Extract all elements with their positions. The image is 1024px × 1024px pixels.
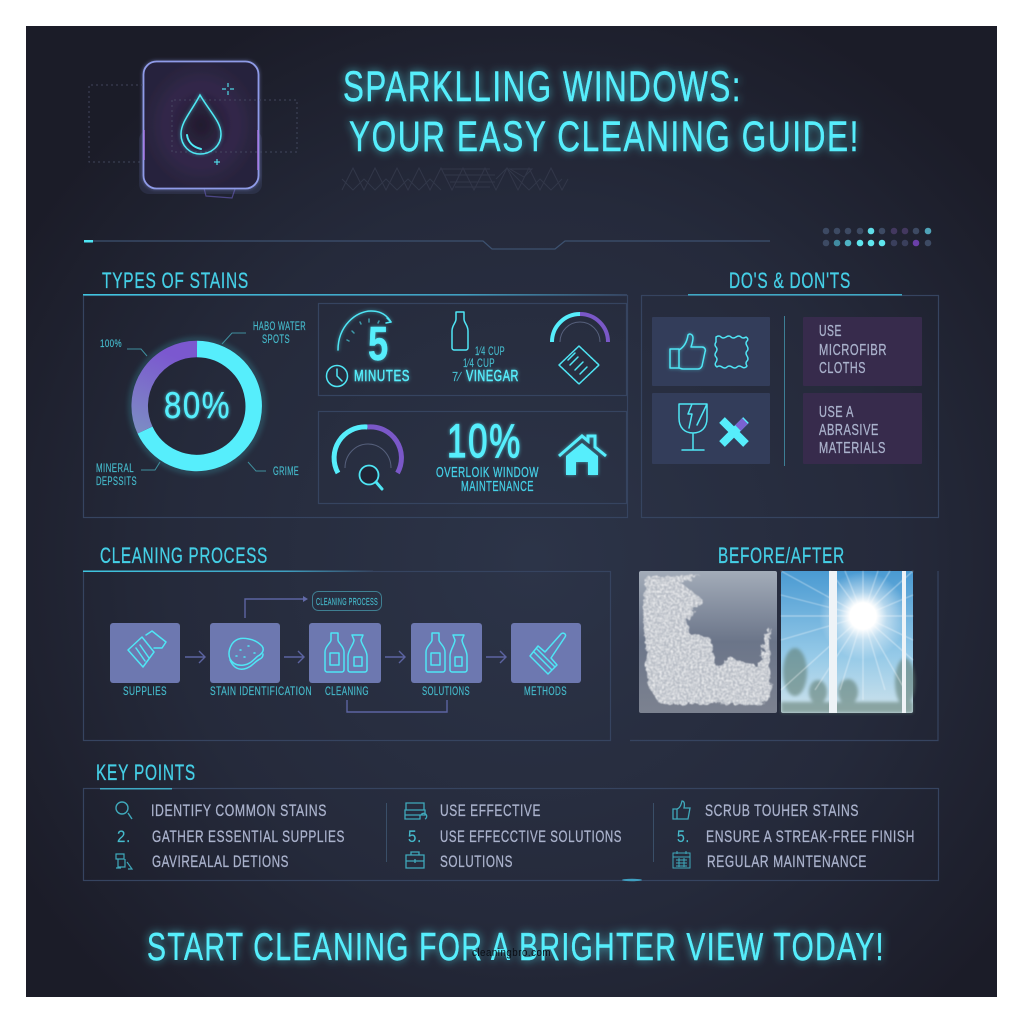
panel: types of stains [83, 294, 628, 518]
step: methods: METHODS [524, 686, 567, 698]
stat: 10%: 10% [447, 414, 522, 467]
donut labels: SPOTS [262, 334, 290, 346]
icon: supply tray [405, 803, 427, 819]
heading: cleaning process: CLEANING PROCESS [100, 543, 268, 568]
icon: water drop in glowing frame [89, 62, 297, 198]
icon: magnifier [116, 802, 132, 819]
stat: 10%: MAINTENANCE [461, 479, 534, 495]
column 3: 5. [677, 827, 690, 846]
column 3: REGULAR MAINTENANCE [707, 852, 867, 871]
icon: calendar [673, 851, 690, 868]
panel: time and vinegar stats [318, 304, 626, 396]
don't text card: USE A [819, 404, 854, 421]
callout: cleaning process pill [245, 592, 382, 618]
arrow [385, 651, 405, 663]
gauge: 5 minutes [326, 311, 410, 386]
donut labels: DEPSSITS [96, 476, 137, 488]
step: cleaning [309, 623, 381, 698]
don't text card [803, 393, 922, 464]
title: YOUR EASY CLEANING GUIDE! [349, 113, 860, 161]
don't text card: MATERIALS [819, 440, 886, 457]
column 1 [116, 801, 345, 871]
do text card [803, 317, 922, 386]
icon: vinegar bottle and measures: 7⁄ [452, 369, 462, 384]
column 3: ENSURE A STREAK-FREE FINISH [706, 827, 915, 846]
icon: thumbs up [673, 801, 690, 819]
icon: toolbox [406, 852, 424, 868]
do text card: USE [819, 323, 842, 340]
icon: cleaning kit [116, 854, 132, 869]
gauge: 5 minutes: MINUTES [354, 368, 410, 385]
stat: 10%: OVERLOIK WINDOW [436, 465, 539, 481]
icon: vinegar bottle and measures: 1⁄4 CUP [475, 344, 505, 358]
icon: house [559, 436, 606, 475]
icon: vinegar bottle and measures [452, 312, 519, 385]
connector bracket [347, 700, 447, 712]
step: supplies: SUPPLIES [123, 686, 167, 698]
heading: types of stains: TYPES OF STAINS [102, 268, 249, 293]
donut labels: 100% [100, 338, 122, 350]
icon: vinegar bottle and measures: 1⁄4 CUP [463, 356, 495, 370]
donut labels [96, 321, 306, 488]
column 2 [405, 801, 622, 871]
callout: cleaning process pill: CLEANING PROCESS [316, 596, 378, 608]
title [343, 63, 860, 161]
column 2: USE EFFECCTIVE SOLUTIONS [440, 827, 622, 846]
column 1: GATHER ESSENTIAL SUPPLIES [152, 827, 345, 846]
panel: before/after frame [630, 571, 938, 740]
column 2: USE EFFECTIVE [440, 801, 541, 820]
column 1: GAVIREALAL DETIONS [152, 852, 289, 871]
heading: key points: KEY POINTS [96, 760, 196, 785]
do card: thumb and cloth [652, 317, 770, 386]
watermark: cleaningbro.com [472, 947, 551, 959]
column 1: 2. [117, 827, 131, 846]
step: stain identification [210, 623, 312, 698]
title: SPARKLLING WINDOWS: [343, 63, 742, 111]
arrow [486, 651, 506, 663]
panel: key points [84, 788, 938, 881]
panel: do's and don'ts [642, 294, 938, 518]
icon: vinegar bottle and measures: VINEGAR [466, 368, 519, 385]
donut labels: MINERAL [96, 463, 134, 475]
gauge: 5 minutes: 5 [368, 318, 390, 371]
column 2: 5. [408, 827, 422, 846]
column 2: SOLUTIONS [440, 852, 513, 871]
step: methods [511, 623, 581, 698]
panel: cleaning process [83, 570, 610, 740]
donut labels: GRIME [273, 466, 299, 478]
don't card: broken glass and cross [652, 393, 770, 464]
heading: before/after: BEFORE/AFTER [718, 543, 845, 568]
column 3: SCRUB TOUHER STAINS [705, 801, 859, 820]
before photo [639, 571, 777, 713]
step: supplies [110, 623, 180, 698]
arrow [185, 651, 205, 663]
step: solutions: SOLUTIONS [422, 686, 470, 698]
header divider [84, 240, 770, 249]
after photo [781, 571, 915, 713]
arrow [284, 651, 304, 663]
do text card: CLOTHS [819, 360, 866, 377]
do text card: MICROFIBR [819, 342, 887, 359]
donut labels: HABO WATER [253, 321, 306, 333]
gauge with magnifier [334, 427, 401, 489]
heading: do's and don'ts: DO'S & DON'TS [729, 268, 851, 293]
donut chart [131, 340, 263, 472]
panel: overlook maintenance stat [318, 412, 626, 504]
step: stain identification: STAIN IDENTIFICATION [210, 686, 312, 698]
column 1: IDENTIFY COMMON STAINS [151, 801, 327, 820]
donut chart: 80% [164, 385, 231, 426]
don't text card: ABRASIVE [819, 422, 879, 439]
decorative triangle strip [342, 168, 568, 190]
dot matrix [823, 228, 931, 246]
gauge and icon: stamp [552, 314, 608, 384]
step: solutions [411, 623, 482, 698]
stat: 10% [436, 414, 539, 495]
column 3 [673, 801, 915, 871]
step: cleaning: CLEANING [325, 686, 369, 698]
